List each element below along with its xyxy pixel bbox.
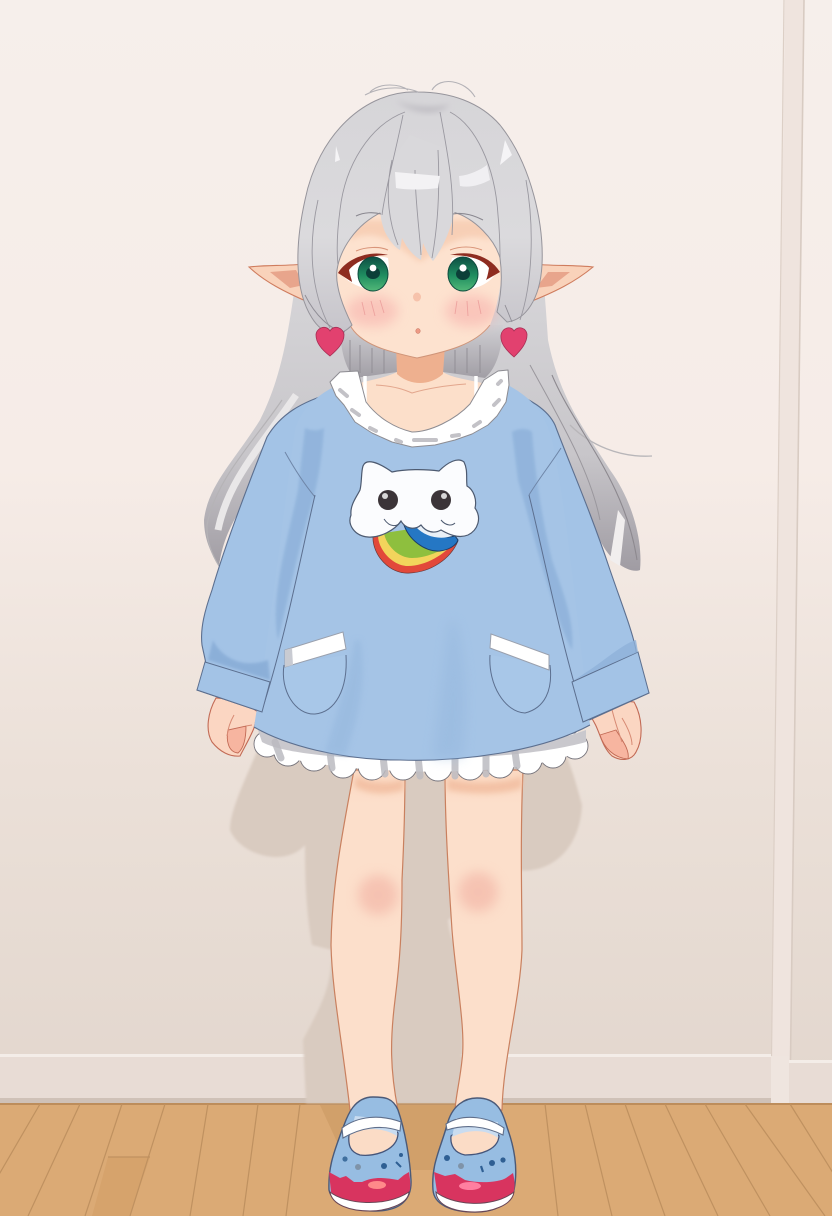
- highlights: [395, 172, 440, 190]
- collar ruffle: [330, 370, 509, 447]
- left pocket: [283, 632, 346, 714]
- left heart earring: [316, 327, 344, 356]
- fabric shading: [276, 428, 324, 640]
- left hand: [208, 698, 258, 756]
- left eye: [338, 247, 389, 291]
- left sleeve: [197, 392, 340, 712]
- sleeve seams: [285, 452, 315, 497]
- body: [254, 385, 590, 760]
- mouth: [416, 329, 420, 333]
- left leg: [331, 770, 405, 1110]
- bangs: [380, 135, 456, 261]
- right heart earring: [501, 328, 527, 357]
- hair strand lines: [312, 112, 531, 328]
- rainbow: [373, 520, 458, 573]
- left cuff: [197, 662, 270, 712]
- cloud head: [350, 460, 479, 537]
- lock bottom strands: [305, 295, 512, 332]
- head and side locks: [298, 92, 542, 334]
- right cuff: [572, 652, 649, 722]
- ahoge strands: [365, 82, 475, 97]
- hem ruffle: [254, 730, 588, 781]
- right leg: [445, 770, 523, 1110]
- left elf ear: [249, 264, 308, 302]
- blue smock with sleeves: [197, 385, 649, 760]
- face: [334, 200, 503, 358]
- left shoe: [329, 1097, 411, 1211]
- blush left: [346, 295, 398, 327]
- cat eyes: [378, 490, 398, 510]
- right eye: [448, 247, 500, 291]
- nose: [413, 292, 421, 302]
- baseboard: [0, 1054, 832, 1104]
- cat mouth: [384, 519, 455, 526]
- right shoe: [433, 1098, 516, 1212]
- cast shadow on wall and floor: [230, 740, 582, 1170]
- blush right: [445, 295, 497, 327]
- crown shading: [395, 100, 450, 113]
- hair: front layer with bangs: [298, 82, 542, 334]
- right pocket: [490, 634, 551, 713]
- right hand: [590, 700, 641, 759]
- hair: back layer: [204, 250, 652, 571]
- right elf ear: [527, 264, 593, 303]
- neck and chest: [360, 345, 482, 440]
- legs: [331, 770, 523, 1110]
- cat cloud applique with rainbow: [350, 460, 479, 573]
- wooden floor: [0, 1103, 832, 1216]
- eyebrows: [356, 213, 483, 220]
- right sleeve: [500, 390, 649, 722]
- forehead shadow: [350, 220, 490, 262]
- knee blush: [358, 875, 398, 915]
